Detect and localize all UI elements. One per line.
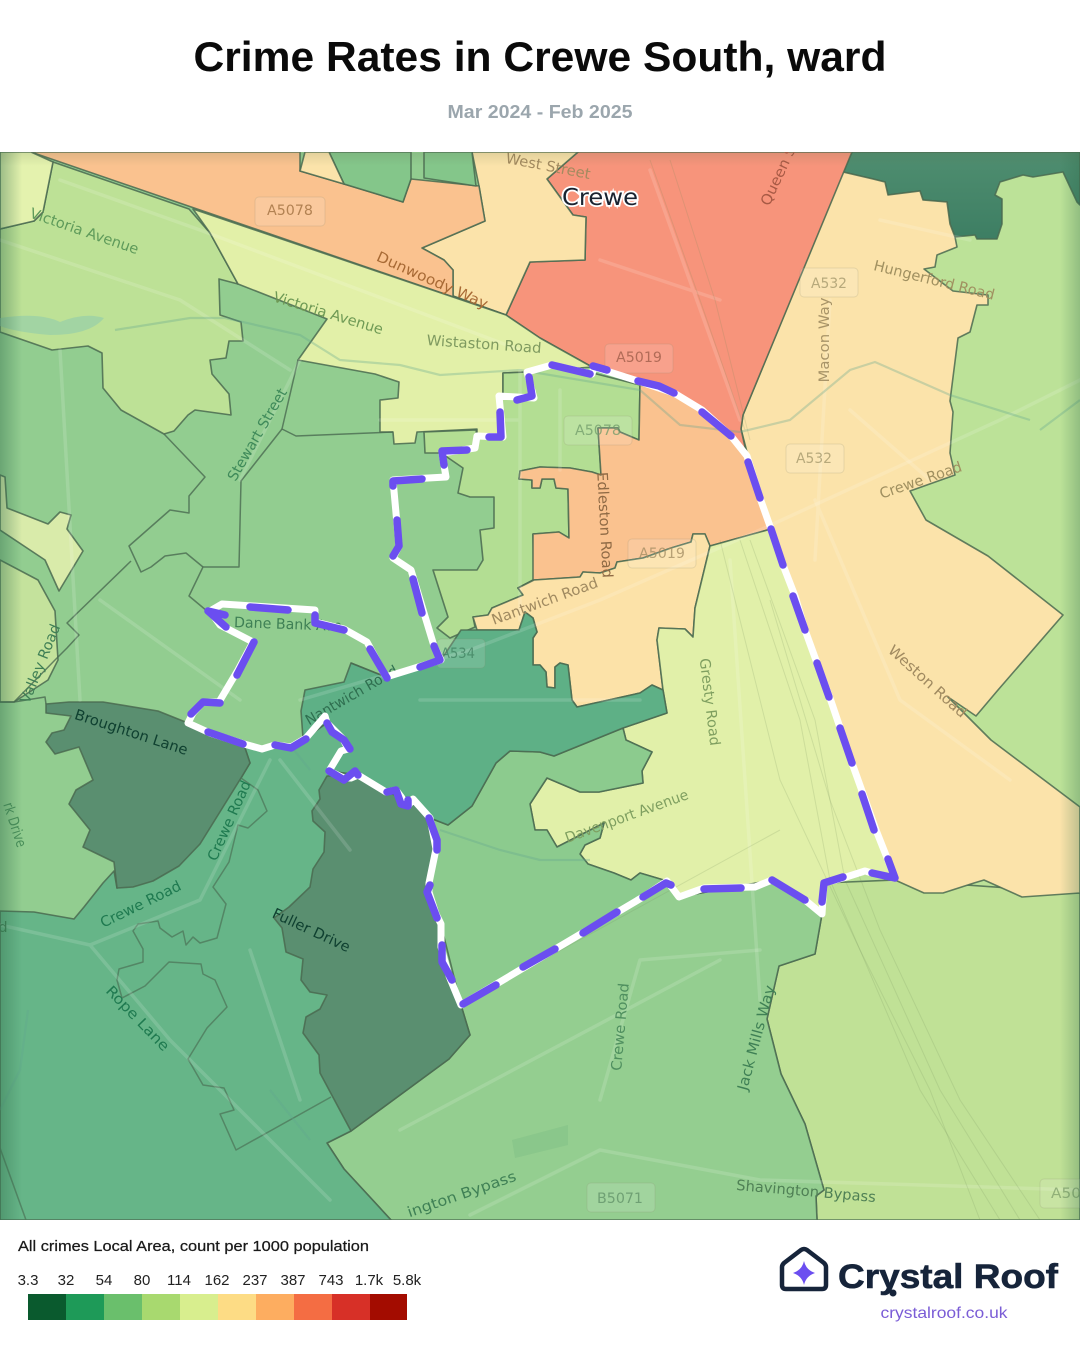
park lake: [0, 316, 104, 335]
map labels: Macon Way: [817, 297, 833, 382]
map labels: A50: [1051, 1186, 1080, 1202]
map labels: Crewe Road: [205, 778, 255, 864]
map labels: Jack Mills Way: [735, 983, 779, 1093]
crime rate area: bottom right: [767, 880, 1080, 1220]
legend title: All crimes Local Area, count per 1000 population: [18, 1238, 369, 1255]
crime rate area: small green block near West Street: [424, 152, 476, 186]
ward boundary lines south-west: [0, 778, 331, 1220]
logo wordmark: Crystal Roof: [838, 1258, 1059, 1296]
map labels: Gresty Road: [696, 657, 722, 747]
website url: crystalroof.co.uk: [880, 1305, 1009, 1322]
map edge shading: [0, 152, 1080, 1220]
legend values: 114: [167, 1272, 191, 1289]
crime rate area: east cream: [741, 172, 1080, 897]
crime rate area: top left pale corner: [0, 152, 53, 229]
map labels: [0, 144, 1080, 1221]
map labels: A5078: [267, 203, 313, 219]
map labels: Hungerford Road: [872, 258, 996, 304]
ward boundary lines inside green areas: [0, 360, 393, 704]
crime rate area: left pale patches: [0, 475, 83, 591]
crime rate area: central orange: [518, 385, 771, 588]
map panel: [0, 144, 1080, 1221]
map labels: Dane Bank Ave: [234, 615, 342, 635]
crime rate area: south centre green: [327, 880, 824, 1220]
map labels: B5071: [597, 1191, 643, 1207]
crime rate area: Valley Road pale: [0, 560, 58, 702]
boundary white line: [188, 365, 895, 1005]
crime rate area: Broughton Lane dark: [46, 702, 250, 888]
crime rate area: Fuller Drive dark: [274, 775, 470, 1131]
crime rate area: central light green with ward section: [424, 363, 640, 638]
map labels: A532: [796, 451, 832, 467]
road shields: [255, 197, 1080, 1212]
map labels: Stewart Street: [225, 386, 291, 484]
crime rate area: small green blocks north: [329, 152, 411, 202]
crime rate area: small cream block north: [300, 152, 344, 184]
map labels: A5019: [639, 546, 685, 562]
railway lines: [548, 160, 1040, 1219]
legend values: 237: [242, 1272, 268, 1289]
map labels: rk Drive: [0, 801, 29, 849]
crime rate area: south of A534 green: [434, 728, 664, 987]
logo: Crystal Roof: [782, 1249, 1059, 1322]
crime rate area: cream West Street: [422, 152, 586, 315]
legend values: 387: [280, 1272, 306, 1289]
map labels: Fuller Drive: [270, 906, 353, 956]
legend values: 80: [134, 1272, 150, 1289]
map labels: Weston Road: [884, 643, 970, 721]
crime rate area: Victoria park light green: [0, 162, 243, 434]
map labels: West Street: [504, 151, 592, 183]
map labels: Davenport Avenue: [563, 787, 691, 847]
map labels: Crewe Road: [98, 879, 184, 931]
map labels: Victoria Avenue: [271, 290, 385, 338]
legend values: 162: [204, 1272, 230, 1289]
title: Crime Rates in Crewe South, ward: [194, 33, 886, 80]
map labels: Valley Road: [18, 622, 64, 706]
crime rate area: Gresty Road pale: [530, 529, 895, 914]
crime rate area: Nantwich Road cream: [473, 534, 710, 707]
map labels: Rope Lane: [102, 983, 172, 1055]
map labels: Nantwich Road: [303, 663, 401, 729]
legend values: 1.7k: [355, 1272, 384, 1289]
legend values: 32: [58, 1272, 74, 1289]
legend colour scale: [28, 1294, 407, 1320]
map labels: A5019: [616, 350, 662, 366]
crime rate area: top right dark green: [843, 152, 1080, 239]
legend values: 3.3: [18, 1272, 38, 1289]
crime rate area: red town centre: [506, 152, 852, 456]
map labels: Victoria Avenue: [28, 206, 141, 258]
legend values: 743: [318, 1272, 344, 1289]
icon: key tail on wordmark: [890, 1290, 896, 1296]
map labels: Queen S: [758, 144, 800, 208]
legend values: 54: [96, 1272, 112, 1289]
map labels: Wistaston Road: [426, 333, 542, 357]
legend values: 5.8k: [393, 1272, 422, 1289]
crime rate area: south-west mid green: [0, 723, 420, 1220]
building patch south: [512, 1125, 568, 1158]
map labels: Shavington Bypass: [736, 1178, 876, 1206]
label: Crewe: Crewe: [562, 185, 638, 211]
crime rate area: Wistaston pale band: [193, 209, 592, 444]
map labels: ington Bypass: [406, 1169, 518, 1221]
map labels: Crewe Road: [609, 982, 633, 1072]
icon: house with star: [782, 1249, 826, 1289]
boundary purple dashes: [191, 365, 895, 1004]
crime rate area: right side light green: [844, 172, 1080, 886]
road network overlay: [0, 170, 1080, 1215]
subtitle: date range: Mar 2024 - Feb 2025: [448, 102, 632, 122]
legend values: [18, 1272, 422, 1289]
rivers: [0, 318, 1080, 1140]
map labels: A5078: [575, 423, 621, 439]
map labels: Edleston Road: [593, 472, 615, 578]
crime rate area: A534 mid green: [301, 612, 667, 825]
map labels: Nantwich Road: [490, 575, 600, 629]
crime rate area: orange A5078 band: [31, 152, 506, 315]
map labels: Dunwoody Way: [374, 249, 490, 313]
map labels: Broughton Lane: [72, 707, 190, 759]
map labels: A532: [811, 276, 847, 292]
map labels: Crewe Road: [878, 459, 964, 503]
map labels: A534: [441, 646, 475, 662]
Crewe South ward boundary: [188, 365, 895, 1005]
legend: [18, 1238, 422, 1320]
